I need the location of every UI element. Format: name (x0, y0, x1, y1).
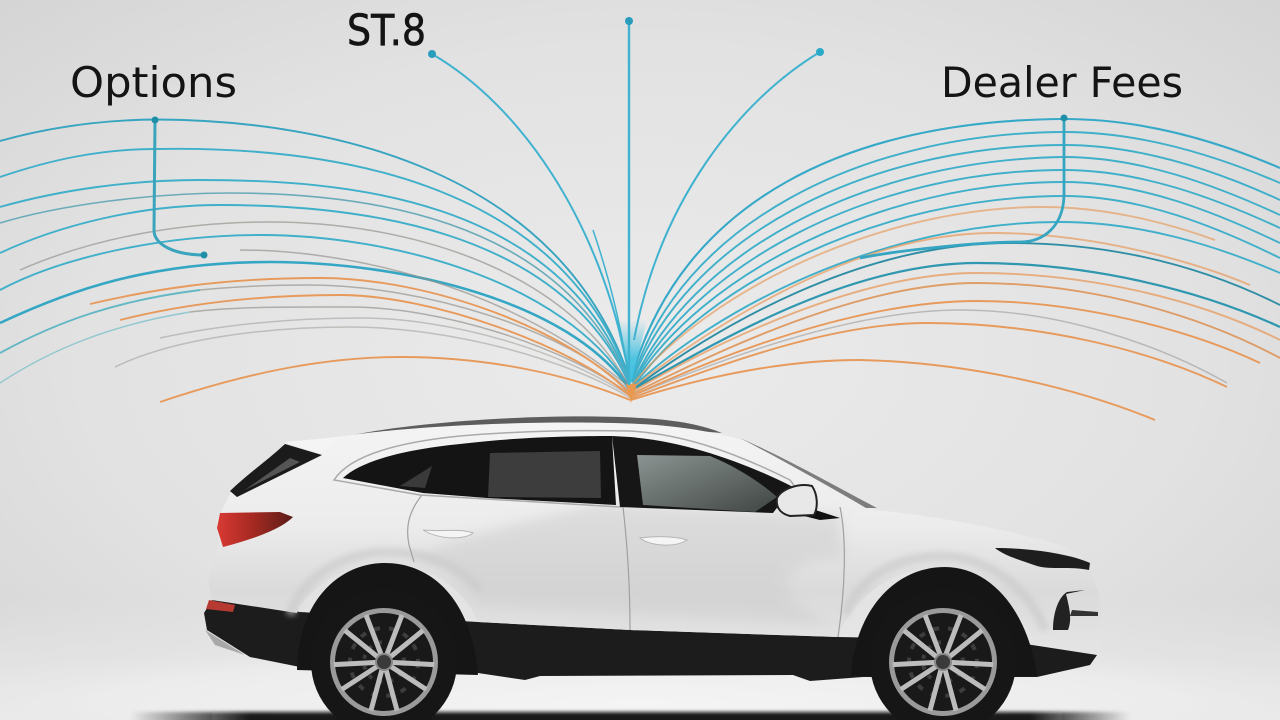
car (204, 416, 1102, 720)
ray: centre vertical line with node (625, 17, 633, 385)
car: roof rail (343, 416, 722, 438)
label: garbled value: ST.8 (347, 6, 426, 56)
fan of blue curves: right side (631, 119, 1280, 390)
car: front intake (1053, 590, 1085, 630)
car: door handles (423, 530, 687, 545)
connector: options (152, 116, 208, 258)
car: rear diffuser (205, 630, 245, 655)
car: fender shading (290, 552, 1045, 630)
car: tail light (217, 512, 293, 547)
car: white body shell (208, 423, 1102, 648)
car: front wheel (870, 589, 1016, 720)
car: windshield sliver (740, 438, 877, 508)
ray: left curved line with node (428, 50, 628, 375)
connector: dealer fees (860, 114, 1068, 258)
car: rear interior glass (488, 451, 601, 498)
car: door shading (410, 505, 845, 625)
car: quarter glass reflection (400, 466, 432, 488)
car: rear side glass (343, 436, 616, 505)
car: rear hatch window (230, 444, 322, 497)
car: headlight (995, 548, 1090, 570)
label: dealer fees: Dealer Fees (941, 58, 1183, 107)
car: underbody and sill (204, 600, 1097, 681)
car: rear wheel (311, 589, 457, 720)
car: window trim (334, 431, 796, 507)
fan of orange curves: left side (90, 278, 630, 402)
car: spoiler (285, 437, 338, 454)
car: wheel arches (297, 563, 1037, 676)
label: options: Options (70, 58, 237, 107)
ray: right curved line with node (634, 48, 824, 340)
car: front glass (637, 455, 777, 512)
ground shadow (130, 712, 1130, 720)
car: mirror (777, 485, 840, 520)
car: rear reflector (206, 600, 235, 612)
car: door seams (408, 495, 844, 637)
car: front side glass frame (612, 436, 793, 513)
fan of grey curves: right side (632, 283, 1280, 396)
fan of orange curves: right side (631, 207, 1280, 420)
orange convergence tip (626, 384, 637, 403)
central glow where the lines converge (615, 320, 647, 384)
fan of blue curves: left side (0, 120, 630, 390)
car: front grille bar (1070, 610, 1098, 616)
fan of grey curves: left side (20, 222, 630, 398)
